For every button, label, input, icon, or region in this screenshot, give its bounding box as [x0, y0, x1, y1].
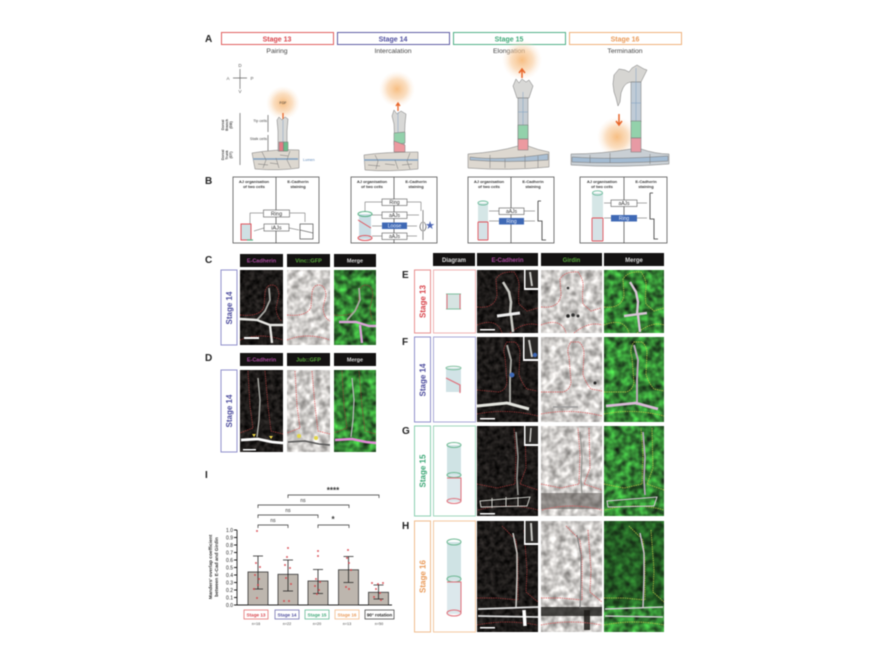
stage 15 AJ box: Ring — [506, 219, 517, 225]
y axis — [226, 528, 392, 609]
merge image — [604, 426, 664, 516]
label D: D — [205, 353, 212, 364]
region labels — [221, 113, 315, 165]
header Girdin: Girdin — [563, 258, 581, 264]
Girdin image — [541, 270, 602, 333]
header Diagram — [433, 253, 475, 266]
stage 15 header — [454, 32, 566, 55]
stage 13 header: Stage 13 — [263, 36, 292, 44]
stage 15 header: Elongation — [493, 48, 525, 55]
significance labels: ns — [270, 518, 276, 524]
label F: F — [402, 337, 408, 348]
stage 13 AJ box: of two cells — [243, 184, 266, 189]
y axis: 0.3 — [226, 580, 233, 586]
E-Cadherin image — [240, 270, 283, 345]
stage 16 AJ box: AJ organisation — [587, 179, 618, 184]
x category labels: Stage 13 — [247, 612, 266, 618]
y axis: 1.0 — [226, 528, 233, 534]
y axis: 0.4 — [226, 573, 233, 579]
axis compass — [226, 63, 254, 94]
stage 14 AJ box: Ring — [389, 200, 400, 206]
data points — [253, 530, 384, 602]
header Merge — [604, 253, 664, 266]
label G: G — [402, 426, 410, 437]
header Vinc GFP — [287, 254, 330, 267]
stage 14 header: Intercalation — [374, 48, 412, 55]
stage label: Stage 13 — [418, 284, 428, 318]
header Merge: Merge — [347, 358, 363, 364]
stage label — [221, 270, 237, 345]
panel I: overlap coefficient bar chart — [205, 470, 394, 626]
y axis: 0.0 — [226, 603, 233, 609]
header E-Cadherin: E-Cadherin — [247, 358, 277, 364]
merge image — [604, 337, 664, 422]
y axis: 0.8 — [226, 543, 233, 549]
sample sizes: n=13 — [343, 622, 351, 626]
E-Cadherin image — [477, 521, 538, 632]
stage label: Stage 15 — [418, 454, 428, 487]
stage 16 AJ box: E-Cadherin — [635, 179, 657, 184]
stage 13 AJ box: AJ organisation — [239, 179, 270, 184]
header Jub GFP — [287, 353, 330, 366]
E-Cadherin image — [477, 270, 538, 333]
label C: C — [205, 255, 212, 266]
stage 14 AJ box — [351, 177, 437, 243]
stage 14 header — [338, 32, 450, 55]
x category labels — [244, 610, 394, 619]
stage 15 AJ box: AJ organisation — [474, 179, 505, 184]
stage 16 header — [570, 32, 682, 55]
panel H: Stage 16 — [402, 521, 664, 632]
significance brackets — [258, 495, 379, 528]
stage 15 header: Stage 15 — [495, 36, 524, 44]
axis compass: V — [238, 89, 242, 94]
region labels: Stalk cells — [250, 137, 267, 141]
error bars — [253, 556, 384, 599]
y axis: 0.2 — [226, 588, 233, 594]
label I: I — [205, 470, 208, 481]
y axis: 0.7 — [226, 550, 233, 556]
region labels: Tip cells — [253, 119, 267, 123]
header E-Cadherin — [477, 253, 538, 266]
label A: A — [205, 34, 212, 45]
significance labels: **** — [327, 486, 340, 495]
Vinc image — [287, 270, 330, 345]
diagram — [434, 521, 476, 632]
header Vinc GFP: Vinc::GFP — [295, 258, 322, 264]
region labels: Trunk — [225, 150, 229, 160]
sample sizes: n=22 — [283, 622, 291, 626]
merge image — [334, 270, 376, 345]
region labels: (DT) — [229, 152, 233, 158]
header Diagram: Diagram — [442, 258, 466, 264]
header E-Cadherin — [240, 353, 283, 366]
Jub image — [287, 370, 330, 452]
stage 15 AJ box: of two cells — [478, 184, 501, 189]
stage 13 AJ box: Ring — [271, 212, 282, 218]
panel E-H headers — [433, 253, 664, 266]
stage label — [414, 426, 430, 516]
merge image — [604, 270, 664, 333]
significance labels: ns — [300, 498, 306, 504]
merge image — [334, 370, 376, 452]
stage 14 tube diagram — [364, 71, 418, 171]
region labels: (DB) — [229, 121, 233, 129]
stage label — [414, 270, 430, 333]
header Merge: Merge — [347, 258, 363, 264]
stage 13 header — [222, 32, 334, 55]
stage label: Stage 14 — [225, 394, 234, 427]
label E: E — [402, 270, 409, 281]
panel G: Stage 15 — [402, 426, 664, 516]
diagram — [434, 337, 476, 422]
x category labels: Stage 16 — [338, 612, 357, 618]
header Merge — [334, 353, 376, 366]
stage 16 AJ box — [580, 177, 667, 243]
panel A: stages of tube formation — [205, 32, 682, 171]
stage 15 AJ box: aAJs — [506, 209, 518, 215]
E-Cadherin image — [477, 337, 538, 422]
stage 14 AJ box: AJ organisation — [357, 179, 388, 184]
significance labels: ns — [285, 508, 291, 514]
header Merge — [334, 254, 376, 267]
stage 16 AJ box: of two cells — [591, 184, 614, 189]
panel F: Stage 14 — [402, 337, 664, 422]
stage 16 header: Termination — [607, 48, 643, 55]
diagram — [434, 270, 476, 333]
header E-Cadherin: E-Cadherin — [491, 258, 524, 264]
y axis: 0.1 — [226, 596, 233, 602]
stage 16 AJ box: aAJs — [618, 201, 630, 207]
stage label: Stage 14 — [418, 363, 428, 396]
header Jub GFP: Jub::GFP — [296, 358, 321, 364]
region labels: Dorsal — [221, 120, 225, 130]
label H: H — [402, 521, 409, 532]
stage 13 AJ box: staining — [290, 184, 306, 189]
x category labels: Stage 14 — [278, 612, 297, 618]
stage 15 AJ box — [468, 177, 554, 243]
stage 15 tube diagram — [468, 40, 549, 169]
stage label: Stage 16 — [418, 559, 428, 593]
stage label — [221, 370, 237, 452]
y axis title line 2: between E-Cad and Girdin — [214, 537, 220, 597]
stage label: Stage 14 — [225, 291, 234, 324]
E-Cadherin image — [240, 370, 283, 452]
stage 14 header: Stage 14 — [379, 36, 408, 44]
stage 14 AJ box: of two cells — [361, 184, 384, 189]
axis compass: D — [238, 63, 242, 68]
region labels: Lumen — [303, 158, 315, 162]
region labels: Branch — [225, 119, 229, 131]
region labels: Dorsal — [221, 150, 225, 160]
stage 13 AJ box: E-Cadherin — [287, 179, 309, 184]
header E-Cadherin — [240, 254, 283, 267]
Girdin image — [541, 426, 602, 516]
merge image — [604, 521, 664, 632]
significance labels: * — [331, 515, 335, 524]
stage 13 AJ box: iAJs — [271, 226, 282, 232]
stage 16 header: Stage 16 — [611, 36, 640, 44]
x category labels: Stage 15 — [308, 612, 327, 618]
panel D: Stage 14 Jub — [205, 353, 376, 452]
sample sizes — [252, 622, 383, 626]
stage 16 AJ box: Ring — [619, 216, 629, 222]
stage 15 AJ box: staining — [525, 184, 541, 189]
panel E: Stage 13 — [402, 270, 664, 333]
x category labels: 90° rotation — [367, 612, 392, 618]
bars — [248, 570, 388, 605]
sample sizes: n=16 — [252, 622, 260, 626]
stage 14 AJ box: staining — [408, 184, 424, 189]
stage 14 AJ box: Loose — [388, 224, 402, 230]
stage 16 tube diagram — [571, 65, 669, 166]
stage label — [414, 521, 430, 632]
header Merge: Merge — [625, 258, 643, 264]
stage label — [414, 337, 430, 422]
y axis title: Manders' overlap coefficient — [208, 534, 214, 599]
Girdin image — [541, 521, 602, 632]
stage 14 AJ box: ★ — [425, 220, 435, 232]
E-Cadherin image — [477, 426, 538, 516]
stage 14 AJ box: E-Cadherin — [405, 179, 427, 184]
sample sizes: n=20 — [313, 622, 321, 626]
panel C: Stage 14 Vinc — [205, 254, 376, 345]
stage 15 AJ box: E-Cadherin — [522, 179, 544, 184]
stage 13 tube diagram — [252, 86, 300, 170]
panel B: AJ organisation — [205, 176, 667, 243]
y axis: 0.6 — [226, 558, 233, 564]
Girdin image — [541, 337, 602, 422]
y axis: 0.9 — [226, 536, 233, 542]
diagram — [434, 426, 476, 516]
sample sizes: n=50 — [375, 622, 383, 626]
stage 16 AJ box: staining — [638, 184, 654, 189]
stage 13 AJ box — [233, 177, 319, 243]
y axis: 0.5 — [226, 566, 233, 572]
stage 13 header: Pairing — [266, 48, 288, 55]
axis compass: P — [250, 76, 254, 81]
stage 14 AJ box: aAJs — [389, 213, 401, 219]
axis compass: A — [226, 76, 230, 81]
stage 13 tube diagram: FGF — [280, 101, 286, 105]
header E-Cadherin: E-Cadherin — [247, 258, 277, 264]
significance labels — [270, 486, 340, 524]
label B: B — [205, 176, 212, 187]
stage 14 AJ box: aAJs — [389, 234, 401, 240]
header Girdin — [541, 253, 602, 266]
